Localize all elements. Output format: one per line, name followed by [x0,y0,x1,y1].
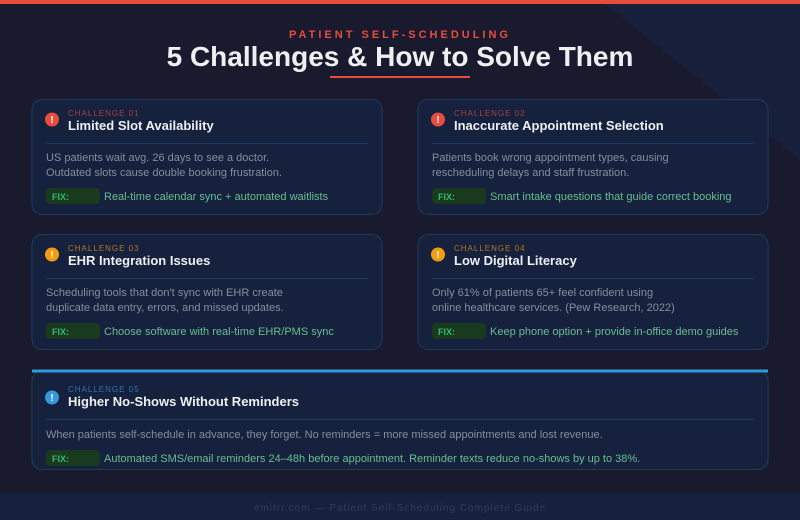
description 03 [46,287,284,314]
footer: emitrr.com — Patient Self-Scheduling Complete Guide [254,503,546,514]
icon: alert red: ! [50,115,54,126]
heading 05: Higher No-Shows Without Reminders [68,394,299,409]
panel: challenge 01 [32,100,382,214]
icon: alert red [431,112,445,126]
description 03: Scheduling tools that don't sync with EHR create [46,287,283,299]
footer [0,494,800,520]
label 05: CHALLENGE 05 [68,385,140,394]
label 02: CHALLENGE 02 [454,109,526,118]
heading 01: Limited Slot Availability [68,118,214,133]
icon: alert orange: ! [436,250,440,261]
header [167,29,633,78]
description 02: Patients book wrong appointment types, causing [432,152,669,164]
heading 04: Low Digital Literacy [454,253,578,268]
fix badge 01: FIX: [52,192,69,202]
label 04: CHALLENGE 04 [454,244,526,253]
description 04: Only 61% of patients 65+ feel confident using [432,287,653,299]
eyebrow: PATIENT SELF-SCHEDULING [289,29,511,41]
icon: alert orange: ! [50,250,54,261]
icon: alert red: ! [436,115,440,126]
fix badge 05: FIX: [52,454,69,464]
fix badge 02 [432,188,486,204]
fix text 01: Real-time calendar sync + automated waitlists [104,191,329,203]
description 01 [46,152,282,179]
description 03: duplicate data entry, errors, and missed updates. [46,302,284,314]
label 01: CHALLENGE 01 [68,109,140,118]
description 02: rescheduling delays and staff frustration. [432,167,629,179]
icon: alert red [45,112,59,126]
description 01: Outdated slots cause double booking frustration. [46,167,282,179]
icon: alert blue: ! [50,393,54,404]
description 02 [432,152,669,179]
fix text 03: Choose software with real-time EHR/PMS sync [104,326,334,338]
description 04: online healthcare services. (Pew Research, 2022) [432,302,675,314]
fix badge 03 [46,323,100,339]
icon: alert orange [431,248,445,262]
title underline [330,76,470,78]
description 01: US patients wait avg. 26 days to see a doctor. [46,152,269,164]
fix badge 05 [46,450,100,466]
icon: alert orange [45,248,59,262]
fix text 05: Automated SMS/email reminders 24–48h before appointment. Reminder texts reduce no-shows by up to 38%. [104,453,640,465]
title: 5 Challenges & How to Solve Them [167,41,633,72]
panel: challenge 02 [418,100,768,214]
fix text 02: Smart intake questions that guide correct booking [490,191,732,203]
fix badge 04: FIX: [438,327,455,337]
heading 03: EHR Integration Issues [68,253,210,268]
fix badge 03: FIX: [52,327,69,337]
fix badge 01 [46,188,100,204]
top accent bar [0,0,800,4]
panel: challenge 05 [32,370,768,470]
description 05: When patients self-schedule in advance, they forget. No reminders = more missed appointments and lost revenue. [46,429,603,441]
panel: challenge 03 [32,234,382,350]
icon: alert blue [45,390,59,404]
heading 02: Inaccurate Appointment Selection [454,118,664,133]
label 03: CHALLENGE 03 [68,244,140,253]
fix text 04: Keep phone option + provide in-office demo guides [490,326,739,338]
fix badge 02: FIX: [438,192,455,202]
fix badge 04 [432,323,486,339]
description 04 [432,287,675,314]
panel: challenge 04 [418,234,768,350]
